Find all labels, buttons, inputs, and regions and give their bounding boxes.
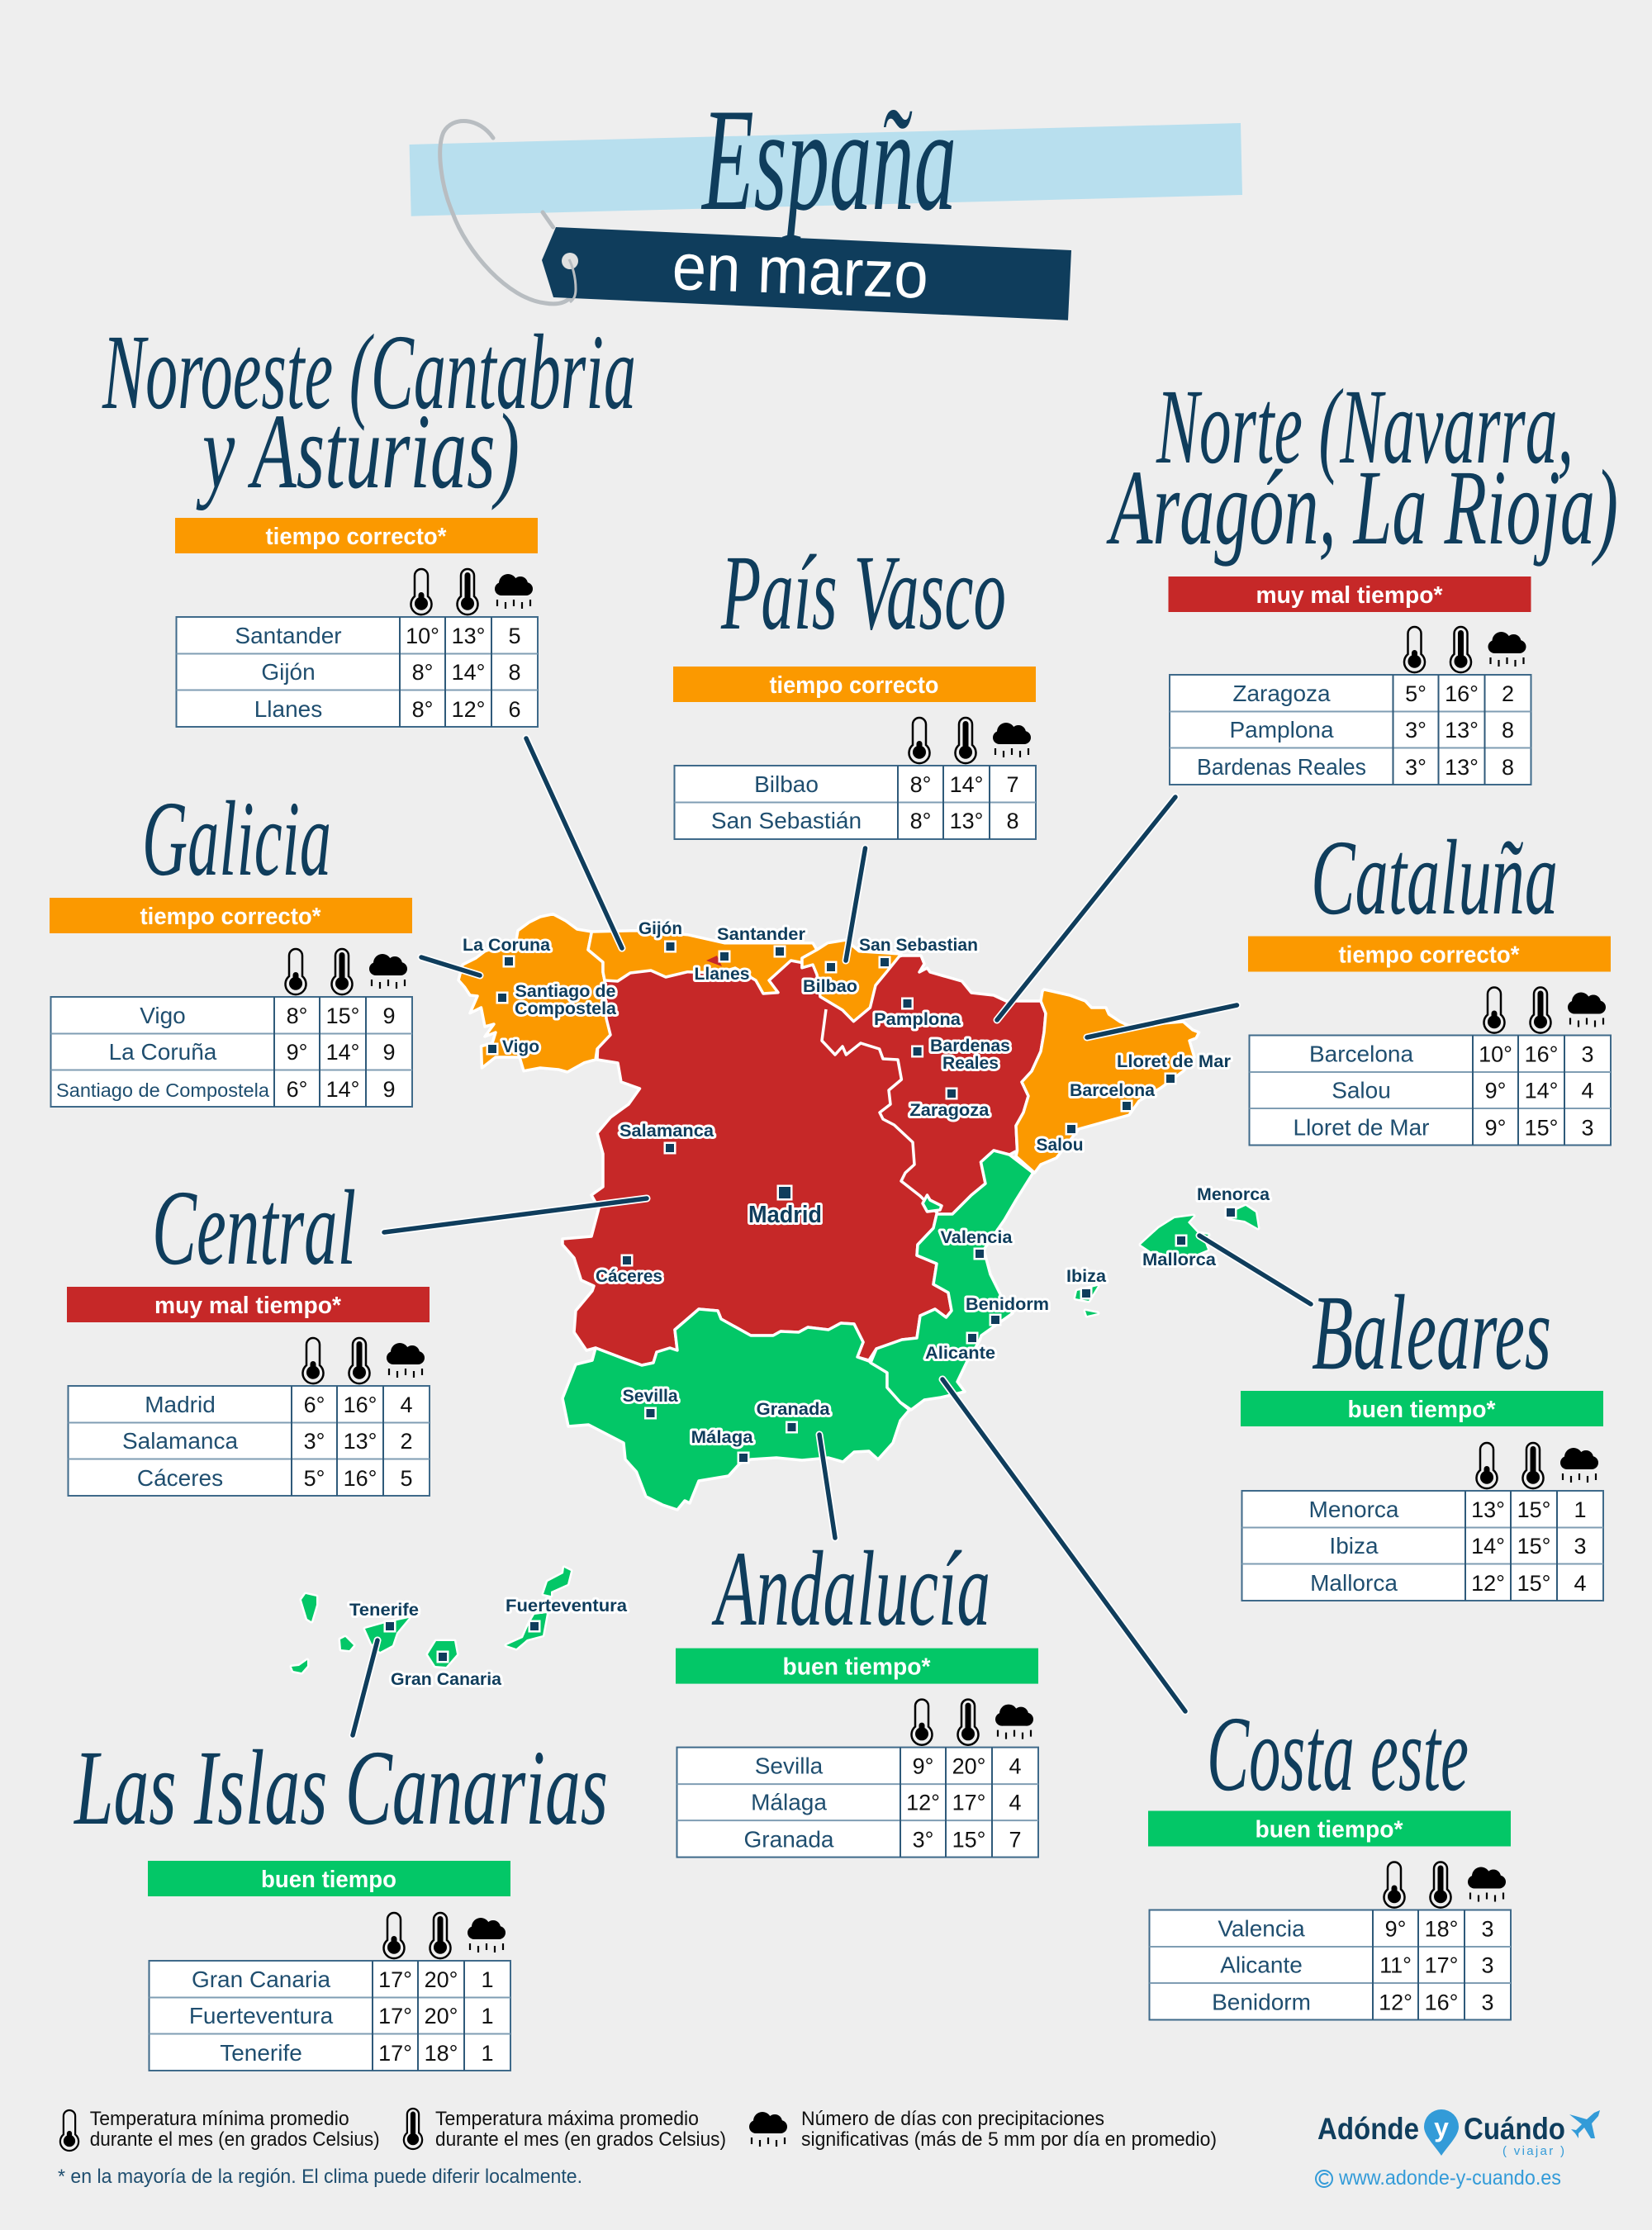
title ribbon	[410, 123, 1242, 216]
weather table: Costa este: 16°	[1425, 1990, 1458, 2015]
weather table: Las Islas Canarias	[148, 1861, 510, 2071]
weather table: Central: 13°	[344, 1429, 377, 1454]
weather table: Galicia: tiempo correcto*	[140, 904, 321, 930]
logo: Adónde y Cuándo: www.adonde-y-cuando.es	[1338, 2166, 1561, 2190]
icon: location pin	[1424, 2109, 1459, 2156]
panel: Norte	[1106, 368, 1618, 785]
legend: minimum temperature: Temperatura mínima promedio	[90, 2108, 349, 2130]
panel: Cataluña	[1248, 818, 1611, 1145]
weather table: Galicia: 9	[382, 1004, 396, 1028]
weather table: Central: muy mal tiempo*	[154, 1293, 342, 1319]
legend: rain days: Número de días con precipitaciones	[801, 2108, 1104, 2130]
weather table: Central: Madrid	[145, 1392, 216, 1417]
weather table: Central: 5	[400, 1466, 413, 1491]
weather table: Norte: 8	[1502, 718, 1514, 743]
weather table: Galicia: 9°	[287, 1040, 307, 1065]
weather table: Andalucía: Málaga	[751, 1790, 827, 1815]
heading: Las Islas Canarias: Las Islas Canarias	[74, 1729, 608, 1848]
weather table: Las Islas Canarias: 20°	[425, 1967, 458, 1992]
weather table: Cataluña: tiempo correcto*	[1338, 942, 1520, 968]
weather table: Baleares: 1	[1574, 1497, 1587, 1522]
heading: País Vasco: País Vasco	[720, 534, 1006, 652]
title block	[410, 78, 1242, 320]
weather table: Noroeste	[175, 518, 538, 727]
legend: rain days: significativas (más de 5 mm por día en promedio)	[801, 2128, 1217, 2151]
weather table: Cataluña: 9°	[1485, 1115, 1506, 1140]
city labels: Gran Canaria	[391, 1670, 501, 1689]
weather table: Las Islas Canarias: Fuerteventura	[189, 2003, 334, 2028]
legend: maximum temperature: Temperatura máxima promedio	[435, 2108, 699, 2130]
weather table: Costa este: 3	[1481, 1952, 1494, 1977]
panel: Noroeste	[102, 313, 636, 727]
city labels: Zaragoza	[909, 1101, 990, 1120]
weather table: Norte: 8	[1502, 755, 1514, 780]
region: País Vasco	[802, 940, 901, 1022]
weather table: Noroeste: tiempo correcto*	[266, 524, 447, 550]
heading: Costa este: Costa este	[1207, 1695, 1469, 1814]
city labels: Bardenas	[930, 1037, 1010, 1056]
weather table: Las Islas Canarias: buen tiempo	[261, 1867, 396, 1893]
weather table: País Vasco: Bilbao	[754, 771, 819, 797]
weather table: Cataluña	[1248, 937, 1611, 1145]
weather table: Andalucía: buen tiempo*	[783, 1654, 931, 1681]
weather table: Galicia: 6°	[287, 1077, 307, 1102]
weather table: Central: Salamanca	[122, 1428, 238, 1454]
weather table: Costa este: Valencia	[1218, 1916, 1305, 1941]
logo: Adónde y Cuándo	[1316, 2109, 1600, 2190]
panel: Costa este	[1148, 1695, 1511, 2020]
weather table: Andalucía: 15°	[952, 1828, 985, 1853]
weather table: Noroeste: 6	[508, 697, 521, 722]
weather table: Noroeste: Llanes	[254, 696, 322, 722]
legend: maximum temperature	[404, 2108, 726, 2151]
weather table: Central: 4	[400, 1393, 413, 1417]
city labels: Málaga	[691, 1428, 753, 1447]
weather table: Baleares: 13°	[1471, 1497, 1505, 1522]
weather table: Noroeste: 14°	[452, 660, 485, 685]
weather table: Central: 16°	[344, 1466, 377, 1491]
weather table: Andalucía: Granada	[744, 1827, 834, 1853]
weather table: Central: 5°	[304, 1466, 325, 1491]
luggage tag string	[440, 121, 577, 304]
city labels: Vigo	[502, 1037, 539, 1056]
weather table: Galicia: Vigo	[140, 1003, 186, 1028]
weather table: Andalucía	[676, 1649, 1038, 1858]
city labels: Lloret de Mar	[1117, 1052, 1231, 1071]
city labels: Cáceres	[596, 1267, 662, 1286]
weather table: Baleares: Ibiza	[1329, 1533, 1379, 1559]
heading: Central: Central	[152, 1169, 356, 1288]
weather table: Galicia	[50, 898, 412, 1107]
region: Costa este enclave	[923, 1195, 942, 1212]
weather table: Galicia: 9	[382, 1040, 396, 1065]
weather table: Norte	[1168, 576, 1531, 785]
weather table: Central: 3°	[304, 1429, 325, 1454]
city labels: Santander	[717, 925, 805, 944]
city labels: Reales	[942, 1054, 999, 1073]
panel: Andalucía	[676, 1530, 1038, 1858]
city labels: Santiago de	[515, 982, 616, 1001]
subtitle: en marzo: en marzo	[671, 230, 929, 312]
weather table: Andalucía: 4	[1009, 1754, 1022, 1779]
weather table: Noroeste: 8°	[412, 660, 433, 685]
weather table: Las Islas Canarias: 1	[481, 2004, 494, 2028]
heading: Noroeste: y Asturias)	[197, 392, 520, 511]
weather table: Noroeste: 10°	[406, 624, 439, 648]
logo: Adónde y Cuándo: y	[1434, 2113, 1449, 2142]
city labels: Alicante	[925, 1344, 995, 1363]
islands: Baleares	[1075, 1206, 1258, 1316]
weather table: Baleares: 15°	[1517, 1497, 1550, 1522]
weather table: Andalucía: 17°	[952, 1791, 985, 1815]
weather table: Noroeste: 8	[508, 660, 521, 685]
region: Galicia	[458, 914, 610, 1072]
weather table: Baleares: 4	[1574, 1571, 1587, 1596]
weather table: Cataluña: Salou	[1332, 1077, 1391, 1103]
leader lines	[353, 738, 1311, 1735]
weather table: Costa este: 17°	[1425, 1952, 1458, 1977]
copyright icon	[1316, 2171, 1332, 2187]
heading: Galicia: Galicia	[142, 780, 331, 899]
weather table: Costa este: 3	[1481, 1916, 1494, 1941]
city labels: Gijón	[638, 919, 682, 938]
city labels: Mallorca	[1142, 1250, 1216, 1269]
weather table: Central	[67, 1287, 430, 1496]
region: Noroeste	[588, 931, 817, 994]
weather table: Noroeste: 8°	[412, 697, 433, 722]
weather table: Central: 6°	[304, 1393, 325, 1417]
Llanes enclave	[706, 956, 722, 966]
weather table: Galicia: La Coruña	[109, 1039, 217, 1065]
map of Spain	[292, 914, 1258, 1672]
city labels: Salou	[1036, 1136, 1084, 1155]
legend: maximum temperature: durante el mes (en grados Celsius)	[435, 2128, 726, 2151]
weather table: Galicia: 14°	[326, 1040, 359, 1065]
weather table: Costa este: 11°	[1379, 1952, 1412, 1977]
city labels: San Sebastian	[859, 936, 978, 955]
weather table: Cataluña: 10°	[1479, 1042, 1512, 1067]
footnote: * en la mayoría de la región. El clima puede diferir localmente.	[58, 2166, 582, 2188]
weather table: País Vasco	[673, 667, 1036, 839]
city labels: Barcelona	[1070, 1081, 1155, 1100]
weather table: País Vasco: 8	[1006, 809, 1019, 833]
region: central red and norte red	[563, 950, 1046, 1365]
weather table: Las Islas Canarias: Gran Canaria	[192, 1967, 330, 1992]
weather table: Baleares	[1241, 1391, 1603, 1601]
weather table: Norte: 13°	[1445, 755, 1479, 780]
weather table: Las Islas Canarias: 20°	[425, 2004, 458, 2028]
weather table: País Vasco: 14°	[950, 772, 983, 797]
boundary: central and norte	[822, 1009, 938, 1214]
heading: Norte	[1106, 368, 1618, 567]
region: Cataluña	[1016, 989, 1199, 1173]
weather table: Las Islas Canarias: 1	[481, 2041, 494, 2066]
weather table: Baleares: buen tiempo*	[1348, 1397, 1496, 1423]
luggage tag	[542, 227, 1071, 320]
weather table: País Vasco: 8°	[910, 772, 931, 797]
city labels: Sevilla	[623, 1387, 678, 1406]
weather table: Norte: Bardenas Reales	[1197, 754, 1366, 780]
weather table: Noroeste: 13°	[452, 624, 485, 648]
weather table: Norte: 2	[1502, 681, 1514, 706]
panel: Galicia	[50, 780, 412, 1107]
weather table: Andalucía: 4	[1009, 1791, 1022, 1815]
panel: Las Islas Canarias	[74, 1729, 608, 2071]
city labels: Ibiza	[1066, 1267, 1106, 1286]
weather table: Las Islas Canarias: Tenerife	[220, 2040, 302, 2066]
weather table: Costa este: 3	[1481, 1990, 1494, 2015]
weather table: País Vasco: 13°	[950, 809, 983, 833]
legend	[58, 2108, 1217, 2188]
weather table: Cataluña: 4	[1581, 1079, 1594, 1103]
weather table: Las Islas Canarias: 18°	[425, 2041, 458, 2066]
weather table: País Vasco: tiempo correcto	[770, 672, 938, 699]
weather table: Baleares: Mallorca	[1310, 1570, 1398, 1596]
weather table: Las Islas Canarias: 17°	[378, 2041, 412, 2066]
weather table: Costa este: 9°	[1385, 1916, 1406, 1941]
weather table: Cataluña: 16°	[1525, 1042, 1558, 1067]
weather table: Galicia: 9	[382, 1077, 396, 1102]
weather table: Norte: 16°	[1445, 681, 1479, 706]
weather table: Baleares: Menorca	[1309, 1497, 1399, 1522]
weather table: Baleares: 12°	[1471, 1571, 1505, 1596]
legend: minimum temperature	[60, 2108, 380, 2151]
islands: Canarias	[292, 1568, 571, 1672]
weather table: Cataluña: 3	[1581, 1115, 1594, 1140]
weather table: Central: 16°	[344, 1393, 377, 1417]
panel: Central	[67, 1169, 430, 1496]
weather table: Norte: Zaragoza	[1232, 681, 1331, 706]
city labels: Pamplona	[874, 1010, 961, 1029]
city labels: La Coruna	[463, 936, 550, 955]
weather table: Las Islas Canarias: 17°	[378, 1967, 412, 1992]
weather table: Las Islas Canarias: 17°	[378, 2004, 412, 2028]
panel: País Vasco	[673, 534, 1036, 839]
weather table: Baleares: 14°	[1471, 1534, 1505, 1559]
city labels: Madrid	[748, 1202, 822, 1228]
weather table: Galicia: 14°	[326, 1077, 359, 1102]
weather table: Andalucía: 12°	[906, 1791, 940, 1815]
weather table: Central: 2	[400, 1429, 413, 1454]
heading: Noroeste: Noroeste (Cantabria	[102, 313, 636, 432]
weather table: Cataluña: 9°	[1485, 1079, 1506, 1103]
panel: Baleares	[1241, 1274, 1603, 1601]
weather table: Norte: 13°	[1445, 718, 1479, 743]
weather table: País Vasco: San Sebastián	[711, 808, 862, 833]
legend: minimum temperature: durante el mes (en grados Celsius)	[90, 2128, 380, 2151]
weather table: Costa este: buen tiempo*	[1256, 1817, 1403, 1843]
weather table: Galicia: Santiago de Compostela	[56, 1079, 269, 1101]
weather table: Norte: 5°	[1405, 681, 1427, 706]
weather table: Andalucía: 9°	[913, 1754, 933, 1779]
weather table: Andalucía: 20°	[952, 1754, 985, 1779]
weather table: Cataluña: 15°	[1525, 1115, 1558, 1140]
city labels: Bilbao	[803, 977, 857, 996]
weather table: País Vasco: 7	[1006, 772, 1019, 797]
weather table: Costa este: 18°	[1425, 1916, 1458, 1941]
weather table: Norte: Pamplona	[1229, 717, 1334, 743]
weather table: Cataluña: Lloret de Mar	[1294, 1115, 1429, 1140]
weather table: Central: Cáceres	[137, 1465, 223, 1491]
region: Costa este	[871, 1151, 1033, 1410]
weather table: Baleares: 15°	[1517, 1571, 1550, 1596]
city labels: Tenerife	[349, 1601, 419, 1620]
weather table: Noroeste: 12°	[452, 697, 485, 722]
weather table: Costa este: Alicante	[1220, 1952, 1303, 1977]
weather table: País Vasco: 8°	[910, 809, 931, 833]
logo: Adónde y Cuándo: ( viajar )	[1502, 2144, 1564, 2158]
logo: Adónde y Cuándo: Cuándo	[1464, 2112, 1565, 2146]
weather table: Noroeste: 5	[508, 624, 521, 648]
region: Andalucía	[563, 1309, 909, 1510]
city labels: Compostela	[515, 999, 616, 1018]
city labels: Menorca	[1197, 1185, 1270, 1204]
weather table: Noroeste: Santander	[235, 623, 342, 648]
heading: Andalucía: Andalucía	[711, 1530, 990, 1649]
city labels: Salamanca	[620, 1122, 714, 1141]
title: España: España	[700, 78, 957, 241]
city labels: Valencia	[940, 1228, 1013, 1247]
city labels: Fuerteventura	[506, 1597, 627, 1616]
weather table: Baleares: 15°	[1517, 1534, 1550, 1559]
weather table: Andalucía: Sevilla	[755, 1753, 824, 1779]
weather table: Galicia: 8°	[287, 1004, 307, 1028]
weather table: Noroeste: Gijón	[261, 659, 316, 685]
weather table: Norte: muy mal tiempo*	[1256, 582, 1443, 609]
weather table: Galicia: 15°	[326, 1004, 359, 1028]
city labels: Llanes	[694, 965, 750, 984]
weather table: Costa este: Benidorm	[1212, 1989, 1311, 2015]
weather table: Baleares: 3	[1574, 1534, 1587, 1559]
city labels	[349, 919, 1270, 1689]
weather table: Andalucía: 7	[1009, 1828, 1022, 1853]
weather table: Cataluña: 14°	[1525, 1079, 1558, 1103]
icon: plane	[1569, 2110, 1600, 2138]
weather table: Norte: 3°	[1405, 755, 1427, 780]
weather table: Norte: 3°	[1405, 718, 1427, 743]
weather table: Cataluña: Barcelona	[1309, 1041, 1413, 1067]
city labels: Granada	[757, 1400, 830, 1419]
weather table: Andalucía: 3°	[913, 1828, 933, 1853]
logo: Adónde y Cuándo: Adónde	[1317, 2112, 1419, 2146]
city markers	[386, 942, 1235, 1661]
weather table: Costa este: 12°	[1379, 1990, 1412, 2015]
weather table: Las Islas Canarias: 1	[481, 1967, 494, 1992]
city labels: Benidorm	[966, 1295, 1049, 1314]
legend: rain days	[749, 2108, 1217, 2151]
heading: Noroeste	[102, 313, 636, 511]
weather table: Cataluña: 3	[1581, 1042, 1594, 1067]
weather table: Costa este	[1148, 1810, 1511, 2020]
